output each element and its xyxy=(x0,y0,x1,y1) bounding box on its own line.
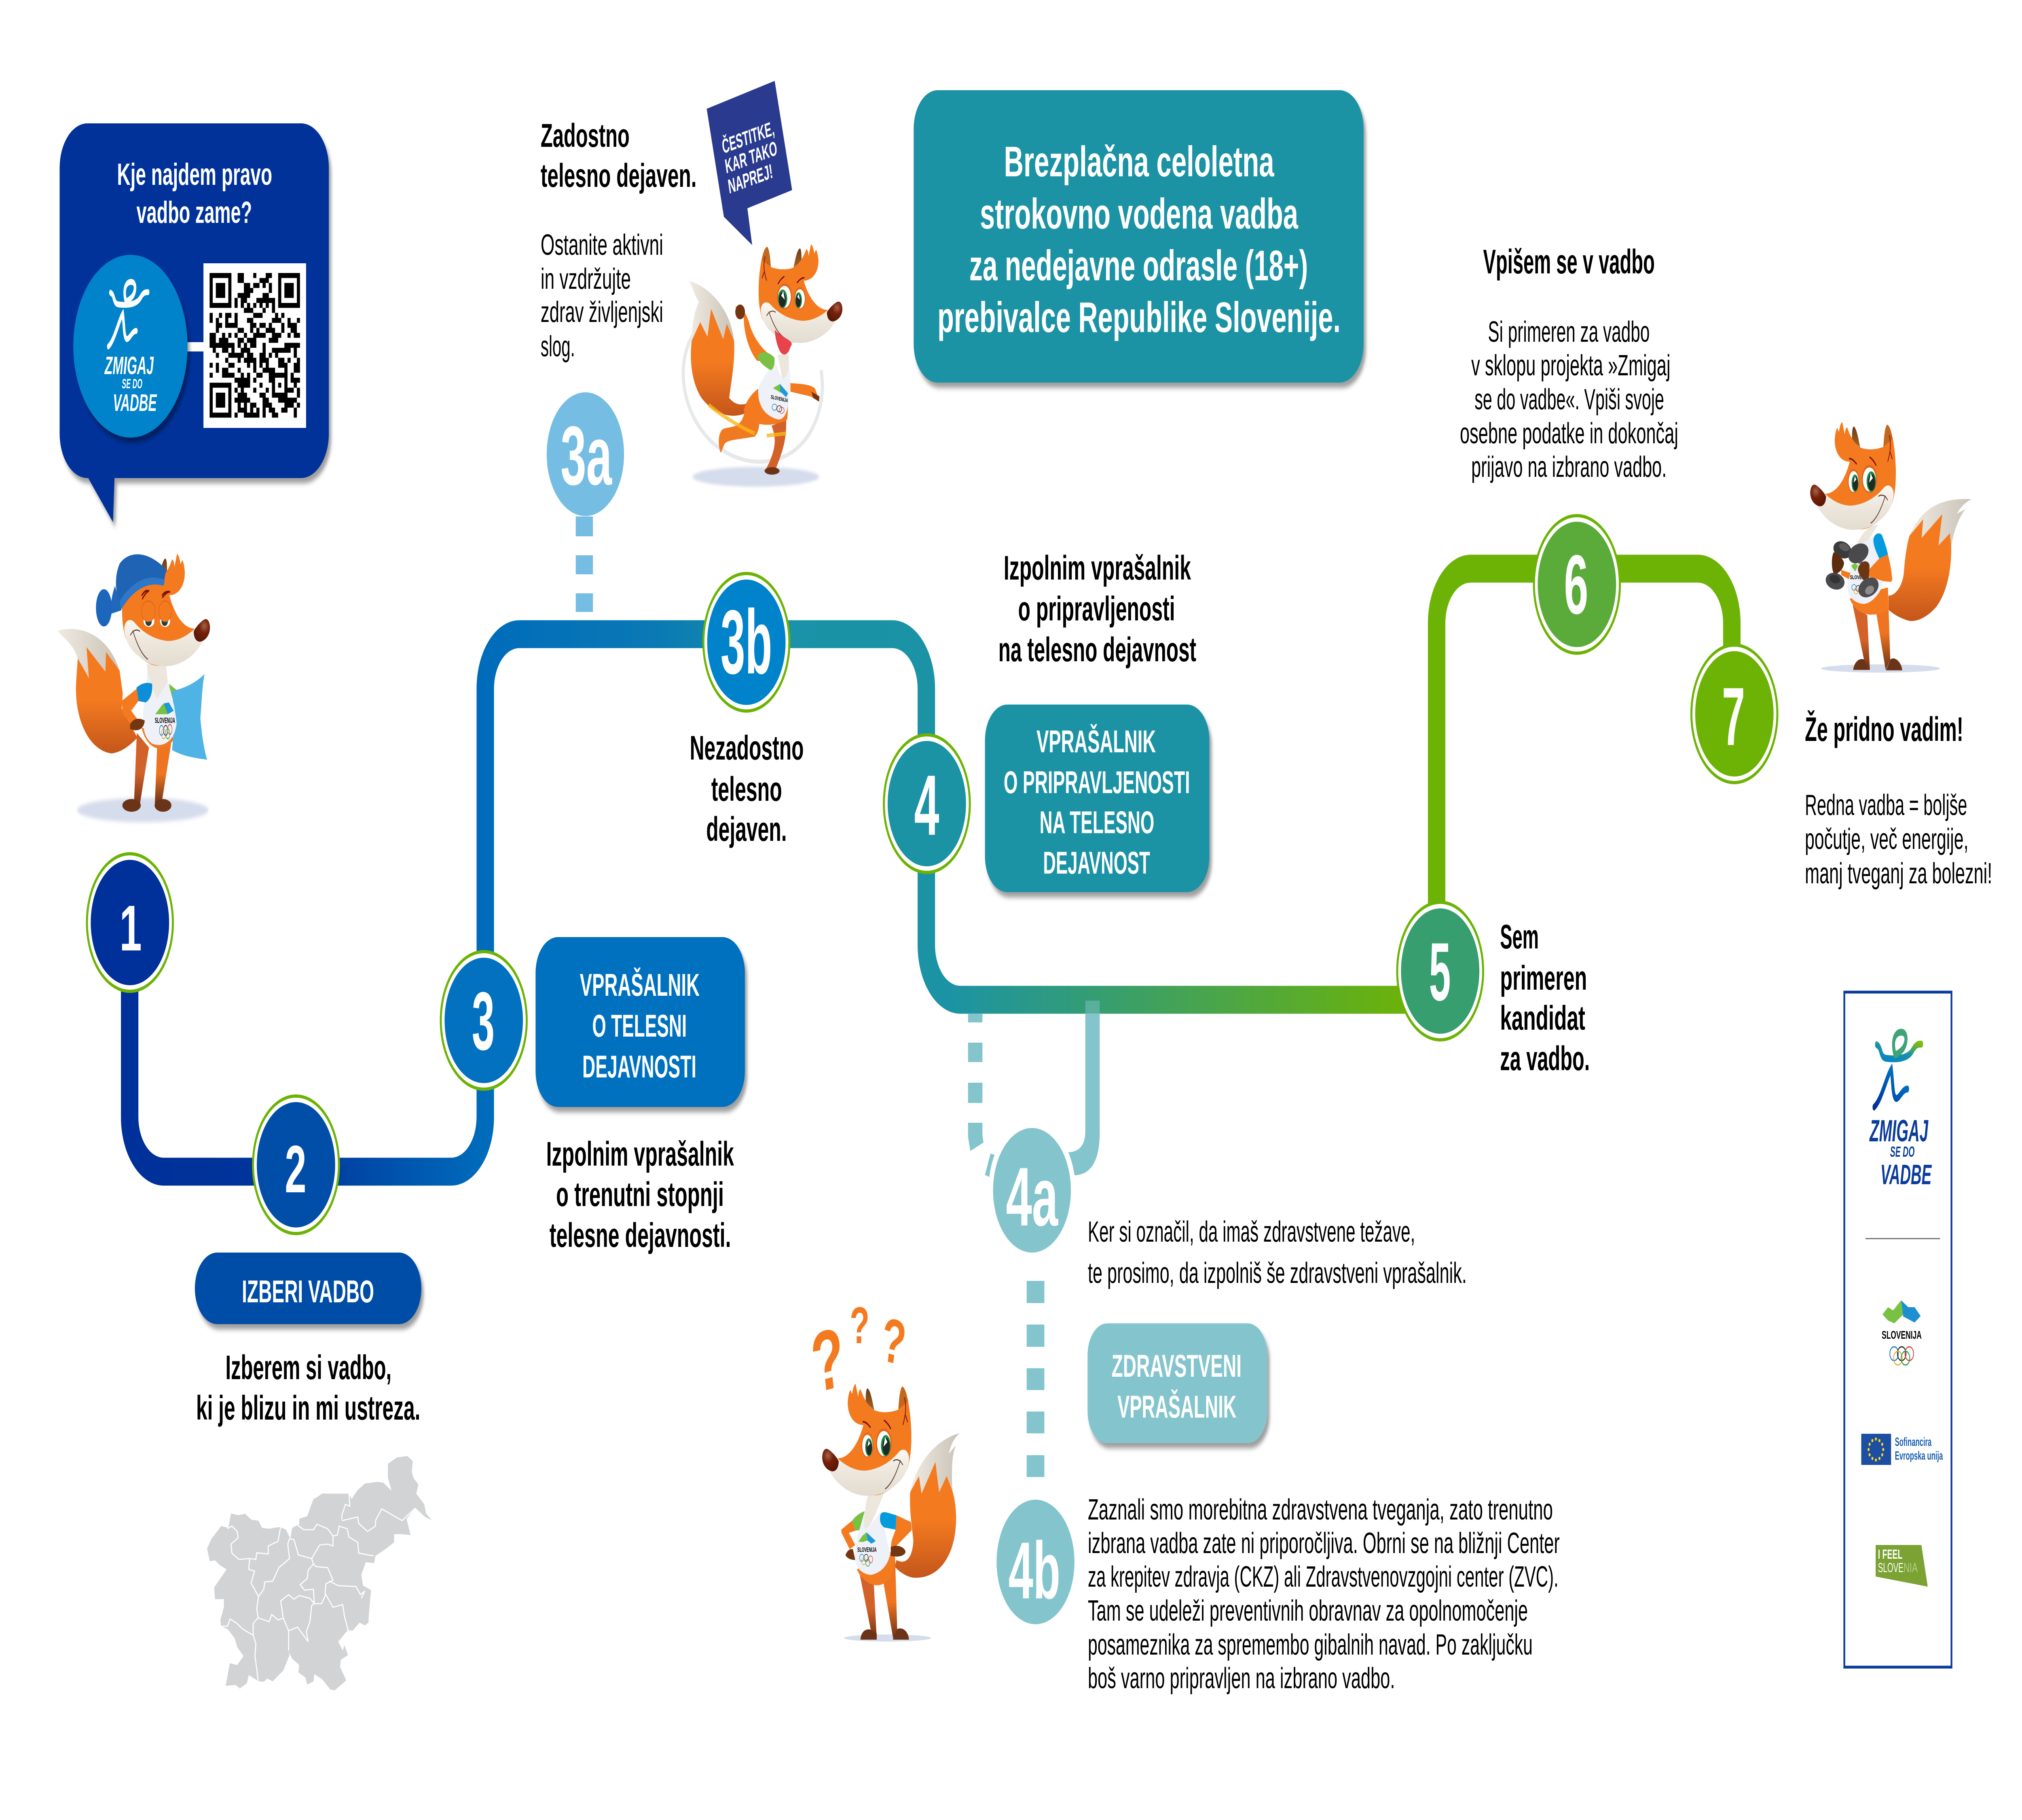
text: step 6: Vpišem se v vadbo xyxy=(1483,243,1655,281)
step 1 marker xyxy=(87,854,173,991)
text: step 4 heading: na telesno dejavnost xyxy=(998,631,1196,669)
logo: Slovenian Olympic team xyxy=(1882,1300,1922,1365)
button: readiness questionnaire: DEJAVNOST xyxy=(1043,845,1150,880)
text: step 3 description xyxy=(546,1135,734,1254)
button: health questionnaire: VPRAŠALNIK xyxy=(1117,1389,1237,1424)
logo: Zmigaj se do vadbe: SE DO xyxy=(1890,1144,1914,1160)
white connector xyxy=(184,342,205,351)
step 3a marker: 3a xyxy=(560,409,612,502)
step 5 marker: 5 xyxy=(1429,926,1451,1018)
text: step 2 description: ki je blizu in mi ustreza. xyxy=(196,1389,420,1427)
logo: Zmigaj se do vadbe xyxy=(1869,1032,1932,1191)
logo circle: Zmigaj se do vadbe: VADBE xyxy=(113,389,157,416)
bubble heading: vadbo zame? xyxy=(137,196,252,230)
text: step 4 heading: Izpolnim vprašalnik xyxy=(1004,549,1191,587)
button: readiness questionnaire: VPRAŠALNIK xyxy=(1036,724,1156,759)
title panel xyxy=(914,90,1364,383)
text: step 3b insufficiently active: dejaven. xyxy=(706,810,787,848)
text: step 4a description: Ker si označil, da imaš zdravstvene težave, xyxy=(1088,1215,1415,1248)
text: step 3b insufficiently active xyxy=(690,729,804,848)
button: readiness questionnaire: NA TELESNO xyxy=(1040,804,1154,840)
dashed connector: path to 4a xyxy=(968,1014,995,1177)
text: step 4b description: za krepitev zdravja (CKZ) ali Zdravstvenovzgojni center (ZVC). xyxy=(1088,1560,1559,1593)
logo: co-funded by the EU: Sofinancira xyxy=(1895,1435,1932,1449)
text: step 3b insufficiently active: Nezadostno xyxy=(690,729,804,767)
dashed connector: 4a to 4b xyxy=(1027,1281,1044,1477)
text: step 4b description: Tam se udeleži preventivnih obravnav za opolnomočenje xyxy=(1088,1594,1528,1627)
text: step 3a sufficiently active: slog. xyxy=(541,330,575,363)
button: physical activity questionnaire: O TELESNI xyxy=(592,1008,687,1043)
button: health questionnaire: ZDRAVSTVENI xyxy=(1112,1348,1242,1384)
text: step 4a description: te prosimo, da izpolniš še zdravstveni vprašalnik. xyxy=(1088,1257,1467,1289)
logo: Zmigaj se do vadbe: ZMIGAJ xyxy=(1869,1114,1929,1148)
text: step 7: manj tveganj za bolezni! xyxy=(1805,857,1992,890)
button: Izberi vadbo: IZBERI VADBO xyxy=(242,1274,374,1309)
step 2 marker xyxy=(253,1096,339,1234)
text: step 3a sufficiently active: zdrav življenjski xyxy=(541,296,663,328)
text: step 6: se do vadbe«. Vpiši svoje xyxy=(1474,383,1664,416)
step 1 marker: 1 xyxy=(120,892,142,965)
fox mascot: hula hoop: SLOVENIJA xyxy=(770,394,789,404)
fox mascot: sleepy with pillow: SLOVENIJA xyxy=(155,716,175,725)
question marks: ? xyxy=(807,1309,849,1412)
banner: congratulations: ČESTITKE, xyxy=(721,116,776,158)
text: step 4b description: Zaznali smo morebitna zdravstvena tveganja, zato trenutno xyxy=(1088,1493,1553,1526)
text: step 5: Sem xyxy=(1500,918,1539,956)
question marks: ? xyxy=(850,1296,869,1354)
text: step 5: primeren xyxy=(1500,959,1587,997)
button: Izberi vadbo xyxy=(195,1253,421,1324)
partner logos panel xyxy=(1844,992,1952,1667)
step 5 marker xyxy=(1397,902,1483,1040)
text: step 7: Redna vadba = boljše xyxy=(1805,789,1967,821)
step 7 marker xyxy=(1691,645,1777,783)
text: step 4b description: posameznika za spremembo gibalnih navad. Po zaključku xyxy=(1088,1628,1533,1661)
speech bubble: where to find exercise xyxy=(60,123,329,522)
text: step 3a sufficiently active: in vzdržujte xyxy=(541,262,631,295)
logo: I feel Slovenia xyxy=(1876,1545,1928,1587)
bubble heading xyxy=(117,158,272,230)
title panel: prebivalce Republike Slovenije. xyxy=(937,293,1341,341)
button: physical activity questionnaire: VPRAŠALNIK xyxy=(580,967,700,1003)
text: step 3 description: o trenutni stopnji xyxy=(556,1175,724,1213)
step 3 marker: 3 xyxy=(472,976,495,1067)
step 3 marker xyxy=(441,952,527,1089)
text: step 5 xyxy=(1500,918,1590,1077)
text: step 3a sufficiently active: telesno dejaven. xyxy=(541,157,696,194)
text: step 4b description: izbrana vadba zate ni priporočljiva. Obrni se na bližnji Center xyxy=(1088,1527,1560,1560)
step 2 marker: 2 xyxy=(285,1132,307,1207)
dashed connector: 3a to path xyxy=(576,516,593,612)
title panel: za nedejavne odrasle (18+) xyxy=(969,241,1308,290)
QR code xyxy=(203,263,306,428)
text: step 5: kandidat xyxy=(1500,999,1585,1037)
step 3b marker xyxy=(703,574,789,711)
map of Slovenia xyxy=(207,1456,432,1690)
step 3b marker: 3b xyxy=(721,591,772,693)
text: step 4b description xyxy=(1088,1493,1560,1695)
question marks xyxy=(807,1296,909,1412)
button: readiness questionnaire: O PRIPRAVLJENOSTI xyxy=(1004,764,1190,800)
logo: I feel Slovenia: I FEEL xyxy=(1878,1547,1902,1562)
text: step 4 heading xyxy=(998,549,1196,669)
step 4b marker xyxy=(996,1500,1074,1624)
logo: I feel Slovenia: SLOVE xyxy=(1878,1560,1904,1575)
logo circle: Zmigaj se do vadbe: SE DO xyxy=(122,376,142,391)
step 6 marker xyxy=(1534,516,1620,653)
step 4 marker: 4 xyxy=(914,758,939,853)
logo: Slovenian Olympic team: SLOVENIJA xyxy=(1882,1329,1922,1341)
fox mascot: question marks: SLOVENIJA xyxy=(857,1547,877,1553)
fox mascot: sleepy with pillow xyxy=(57,554,210,822)
step 4a marker: 4a xyxy=(1006,1151,1058,1243)
text: step 3b insufficiently active: telesno xyxy=(711,770,782,808)
fox mascot: dumbbells: SLOVEN xyxy=(1850,574,1864,580)
button: readiness questionnaire xyxy=(985,705,1210,892)
button: physical activity questionnaire: DEJAVNOSTI xyxy=(582,1049,696,1084)
logo: I feel Slovenia: NIA xyxy=(1904,1560,1918,1575)
step 4a marker xyxy=(988,1121,1075,1260)
connector path: steps 5 to 7 xyxy=(1436,569,1732,987)
fox mascot: hula hoop xyxy=(683,244,842,487)
step 4 marker xyxy=(884,735,970,872)
button: physical activity questionnaire xyxy=(535,937,745,1107)
step 3a marker xyxy=(547,392,624,516)
fox mascot: question marks xyxy=(807,1296,960,1642)
title panel: strokovno vodena vadba xyxy=(980,190,1299,238)
text: step 3 description: Izpolnim vprašalnik xyxy=(546,1135,734,1173)
text: step 4a description xyxy=(1088,1215,1467,1289)
dumbbell weights xyxy=(1825,539,1880,601)
text: step 3a sufficiently active: Ostanite aktivni xyxy=(541,229,663,261)
text: step 6: osebne podatke in dokončaj xyxy=(1460,417,1678,450)
banner: congratulations: NAPREJ! xyxy=(727,159,774,198)
text: step 6 xyxy=(1460,243,1678,483)
logo: Zmigaj se do vadbe: VADBE xyxy=(1880,1159,1932,1191)
text: step 3a sufficiently active: Zadostno xyxy=(541,117,630,154)
text: step 4 heading: o pripravljenosti xyxy=(1018,590,1175,628)
text: step 4b description: boš varno pripravljen na izbrano vadbo. xyxy=(1088,1662,1395,1695)
text: step 3 description: telesne dejavnosti. xyxy=(550,1216,731,1254)
text: step 6: prijavo na izbrano vadbo. xyxy=(1471,451,1667,483)
text: step 7: Že pridno vadim! xyxy=(1805,710,1963,748)
banner: congratulations: KAR TAKO xyxy=(723,136,778,178)
step 6 marker: 6 xyxy=(1564,538,1588,631)
logo circle: Zmigaj se do vadbe xyxy=(73,255,188,438)
text: step 7 xyxy=(1805,710,1992,890)
fox mascot: dumbbells xyxy=(1810,422,1972,673)
step 7 marker: 7 xyxy=(1722,671,1745,763)
bubble heading: Kje najdem pravo xyxy=(117,158,272,192)
title panel: Brezplačna celoletna xyxy=(1004,138,1274,186)
banner: congratulations xyxy=(707,81,792,245)
button: health questionnaire xyxy=(1087,1323,1267,1443)
text: step 7: počutje, več energije, xyxy=(1805,823,1969,855)
text: step 2 description: Izberem si vadbo, xyxy=(226,1348,391,1386)
text: step 5: za vadbo. xyxy=(1500,1039,1590,1077)
solid connector: 4a back to path xyxy=(1067,1001,1100,1175)
text: step 6: Si primeren za vadbo xyxy=(1488,315,1650,348)
logo: co-funded by the EU: Evropska unija xyxy=(1895,1449,1943,1462)
logo: co-funded by the EU xyxy=(1861,1434,1943,1465)
text: step 6: v sklopu projekta »Zmigaj xyxy=(1471,349,1671,382)
question marks: ? xyxy=(878,1304,909,1380)
connector path: steps 1 to 5 xyxy=(130,634,1446,1172)
text: step 2 description xyxy=(196,1348,420,1427)
text: step 3a sufficiently active xyxy=(541,117,696,363)
step 4b marker: 4b xyxy=(1009,1526,1060,1616)
logo circle: Zmigaj se do vadbe: ZMIGAJ xyxy=(104,351,154,379)
